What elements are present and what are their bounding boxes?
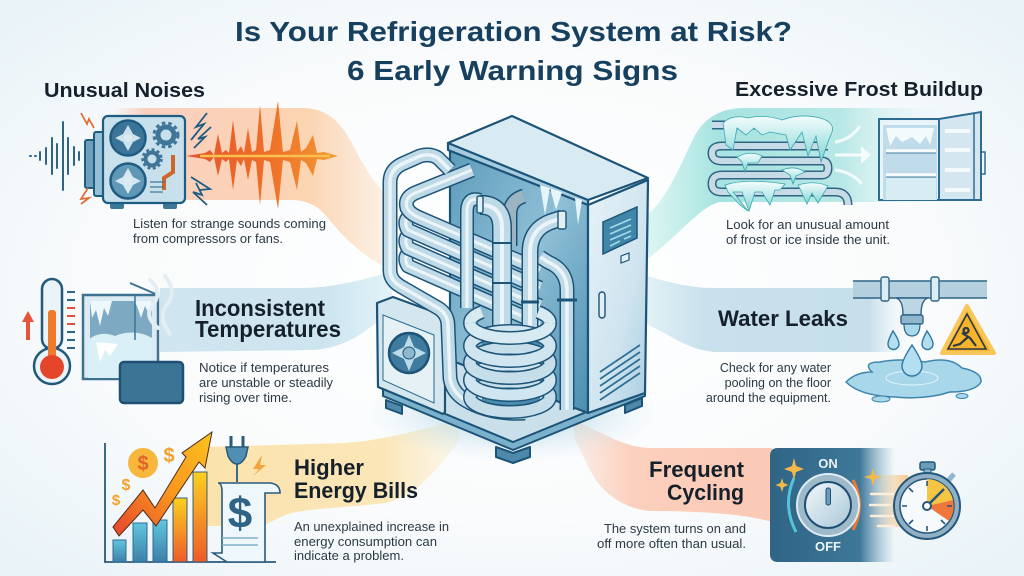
icon: lightning sparks bbox=[81, 113, 211, 205]
text: temperature description: rising over time. bbox=[199, 391, 292, 405]
vertical coil rings bbox=[470, 312, 550, 412]
icon: fans bbox=[110, 120, 146, 198]
icon: on/off switch panel bbox=[770, 448, 895, 562]
heading: higher energy bills: Higher bbox=[294, 455, 364, 480]
central refrigeration unit bbox=[362, 116, 662, 463]
text: water description bbox=[706, 361, 831, 405]
text: energy description bbox=[294, 520, 449, 563]
text: cycling description bbox=[597, 522, 746, 551]
panel: unusual noises bbox=[30, 80, 392, 270]
icon: compressor unit bbox=[85, 116, 185, 209]
heading: higher energy bills: Energy Bills bbox=[294, 478, 418, 503]
icon: rising arrow bbox=[22, 311, 34, 340]
icon: on/off switch panel: ON bbox=[818, 456, 838, 471]
text: frost description: Look for an unusual amount bbox=[726, 218, 890, 232]
text: noises description: Listen for strange sounds coming bbox=[133, 217, 326, 231]
panel: inconsistent temperatures bbox=[22, 272, 392, 405]
icon: on/off switch panel: OFF bbox=[815, 539, 841, 554]
base platform bbox=[383, 335, 645, 463]
text: energy description: An unexplained increase in bbox=[294, 520, 449, 534]
heading: unusual noises: Unusual Noises bbox=[44, 80, 205, 102]
title: 6 Early Warning Signs bbox=[347, 55, 678, 86]
icon: speed lines bbox=[870, 475, 908, 527]
icon: stopwatch bbox=[894, 462, 960, 539]
text: noises description bbox=[133, 217, 326, 246]
text: cycling description: off more often than usual. bbox=[597, 537, 746, 551]
text: water description: around the equipment. bbox=[706, 391, 831, 405]
large outer pipe bbox=[390, 155, 525, 413]
panel: higher energy bills bbox=[105, 420, 460, 563]
chart: orange sound wave bbox=[186, 101, 338, 209]
icon: coin and dollar signs: $ bbox=[122, 477, 131, 494]
icon: ice on pipes bbox=[723, 116, 832, 211]
text: temperature description: are unstable or steadily bbox=[199, 376, 334, 390]
icon: water puddle bbox=[846, 360, 981, 402]
heading: frequent cycling: Frequent bbox=[649, 457, 745, 482]
ribbon: peach connector bbox=[572, 420, 772, 522]
icon: gears bbox=[142, 123, 178, 168]
icon: coin and dollar signs: $ bbox=[137, 453, 149, 475]
heading: inconsistent temperatures: Inconsistent bbox=[195, 295, 325, 321]
heading: frequent cycling bbox=[649, 457, 745, 505]
text: frost description: of frost or ice inside the unit. bbox=[726, 233, 890, 247]
text: temperature description bbox=[199, 361, 334, 405]
coil core bbox=[482, 330, 540, 408]
icon: rising arrow bbox=[113, 432, 212, 536]
text: noises description: from compressors or fans. bbox=[133, 232, 283, 246]
icon: coin and dollar signs: $ bbox=[163, 445, 175, 467]
icon: left sound wave bbox=[30, 122, 79, 190]
ribbon: teal connector bbox=[640, 108, 950, 265]
icon: lightning bolt bbox=[253, 455, 266, 476]
title: Is Your Refrigeration System at Risk? bbox=[235, 16, 792, 47]
icon: water drops bbox=[888, 331, 933, 376]
icon: coin and dollar signs bbox=[112, 445, 175, 509]
panel: frequent cycling bbox=[572, 420, 960, 562]
icon: display panel bbox=[120, 362, 183, 403]
icon: frosted coil pipes bbox=[712, 116, 848, 211]
ribbon: blue connector bbox=[636, 274, 910, 352]
coiled horizontal tubes bbox=[406, 170, 540, 324]
heading: higher energy bills bbox=[294, 455, 418, 503]
icon: energy bill bbox=[213, 483, 280, 562]
text: water description: Check for any water bbox=[720, 361, 831, 375]
heading: excessive frost buildup: Excessive Frost Buildup bbox=[735, 79, 983, 101]
heading: inconsistent temperatures: Temperatures bbox=[195, 316, 341, 342]
icon: coin and dollar signs: $ bbox=[112, 492, 121, 509]
text: energy description: indicate a problem. bbox=[294, 549, 404, 563]
cabinet body bbox=[448, 116, 648, 413]
text: frost description bbox=[726, 218, 890, 247]
heading: inconsistent temperatures bbox=[195, 295, 341, 342]
icon: open freezer bbox=[879, 112, 985, 200]
ribbon: yellow connector bbox=[205, 420, 460, 526]
ribbon: orange connector bbox=[112, 108, 392, 270]
door details bbox=[599, 207, 640, 400]
text: energy description: energy consumption can bbox=[294, 535, 437, 549]
icon: warning triangle bbox=[942, 306, 994, 353]
chart: rising bars bbox=[105, 443, 276, 562]
icicles bbox=[540, 185, 582, 225]
vertical pipes bbox=[467, 196, 577, 410]
icon: airflow arrows bbox=[835, 126, 865, 184]
icon: energy bill: $ bbox=[228, 489, 252, 538]
icon: freezer with ice bbox=[83, 283, 158, 379]
icon: thermometer bbox=[34, 279, 75, 384]
text: water description: pooling on the floor bbox=[725, 376, 831, 390]
heading: water leaks: Water Leaks bbox=[718, 306, 848, 331]
heading: frequent cycling: Cycling bbox=[667, 480, 744, 505]
ribbon: blue connector bbox=[160, 272, 392, 352]
frost shadow bbox=[362, 362, 662, 462]
icon: heat wisps bbox=[149, 276, 172, 334]
text: cycling description: The system turns on and bbox=[604, 522, 746, 536]
fan housing bbox=[377, 297, 445, 414]
icon: plug bbox=[226, 436, 248, 482]
text: temperature description: Notice if temperatures bbox=[199, 361, 329, 375]
icon: leaking pipe bbox=[853, 277, 987, 336]
title bbox=[235, 16, 792, 86]
panel: excessive frost buildup bbox=[640, 79, 985, 265]
icon: knob bbox=[797, 474, 859, 536]
panel: water leaks bbox=[636, 274, 994, 405]
